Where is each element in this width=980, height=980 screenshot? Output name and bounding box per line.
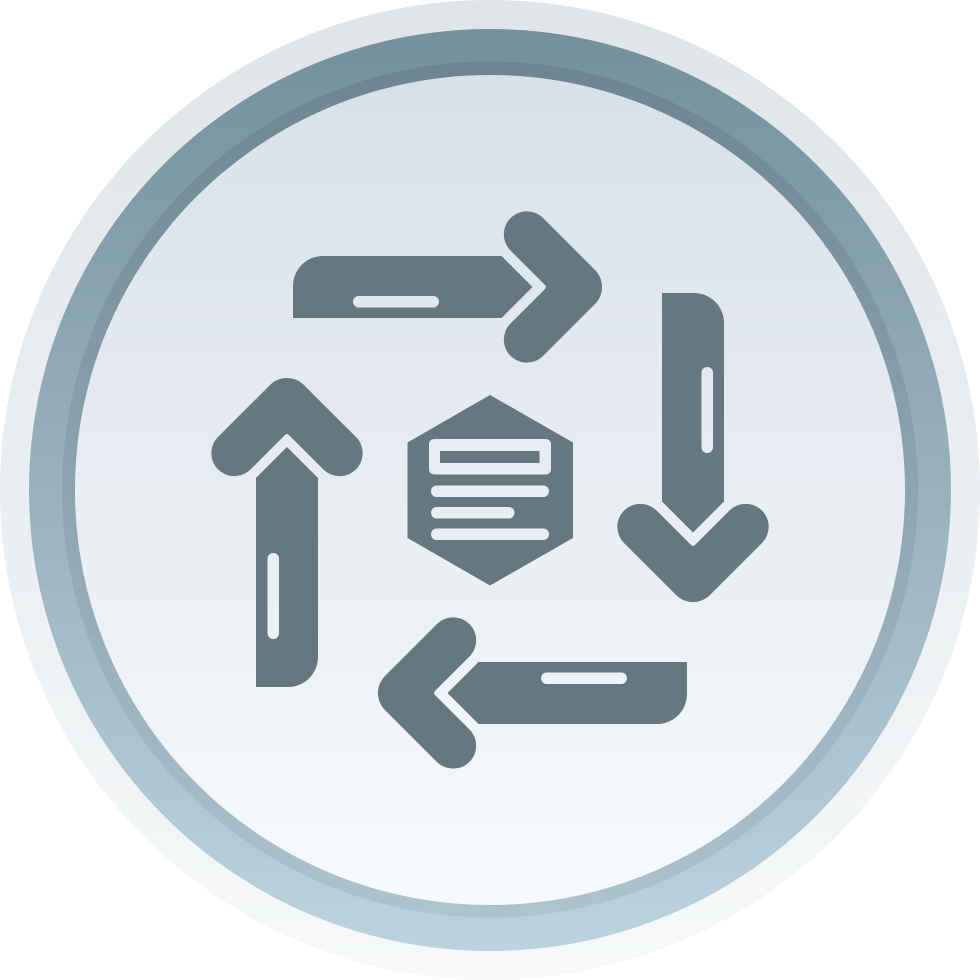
cycle arrows bbox=[211, 211, 769, 769]
arrow: bottom, pointing left bbox=[378, 617, 687, 769]
central hexagon document bbox=[408, 395, 573, 586]
inner ring shadow bbox=[62, 62, 918, 918]
arrow: right, pointing down bbox=[617, 293, 769, 602]
document header box bbox=[429, 439, 551, 474]
arrow: top, pointing right bbox=[293, 211, 602, 363]
arrow: left, pointing up bbox=[211, 378, 363, 687]
document text lines bbox=[431, 486, 549, 540]
inner face bbox=[75, 75, 905, 905]
